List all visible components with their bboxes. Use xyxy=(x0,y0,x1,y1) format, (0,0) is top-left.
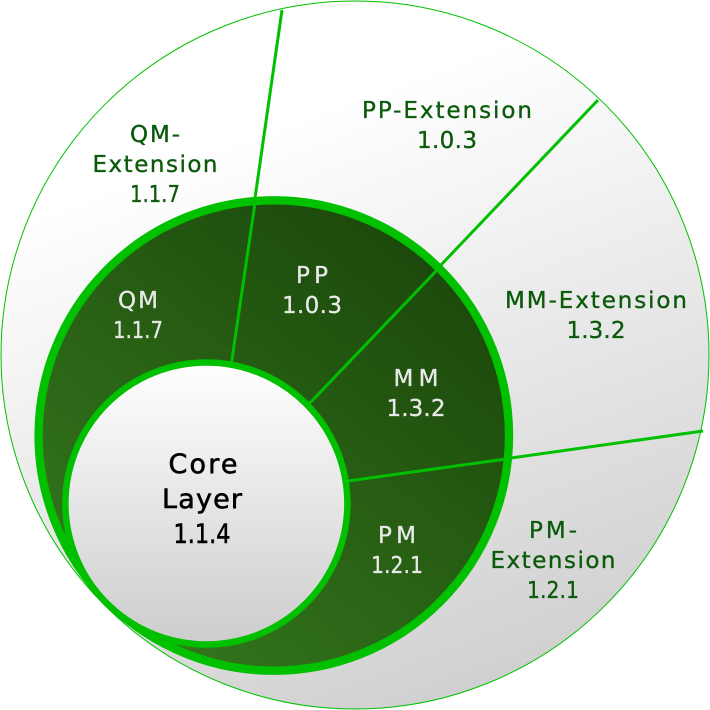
extension dividers xyxy=(255,10,703,458)
label: PM-Extension: 1.2.1 xyxy=(527,578,579,604)
label: QM: QM xyxy=(118,288,158,314)
extension labels xyxy=(92,98,687,604)
label: PP-Extension: PP-Extension xyxy=(362,98,532,124)
label: MM: 1.3.2 xyxy=(386,396,446,422)
label: PM-Extension: PM- xyxy=(529,518,577,544)
core label: 1.1.4 xyxy=(174,519,230,550)
label: MM: MM xyxy=(394,366,438,392)
label: PM-Extension: Extension xyxy=(490,548,616,574)
label: MM-Extension: MM-Extension xyxy=(505,288,687,314)
label: PP-Extension: 1.0.3 xyxy=(417,128,477,154)
core label xyxy=(162,449,243,550)
label: QM-Extension: 1.1.7 xyxy=(130,182,180,208)
label: PP: 1.0.3 xyxy=(282,293,342,319)
label: PM: 1.2.1 xyxy=(371,553,423,579)
core label: Core xyxy=(168,449,238,480)
label: PM: PM xyxy=(378,523,416,549)
module dividers xyxy=(231,203,506,481)
label: QM-Extension: Extension xyxy=(92,152,218,178)
label: PP: PP xyxy=(296,263,328,289)
core label: Layer xyxy=(162,484,243,515)
middle module ring xyxy=(39,200,509,671)
label: QM-Extension: QM- xyxy=(130,122,180,148)
module labels xyxy=(113,263,446,579)
label: MM-Extension: 1.3.2 xyxy=(566,318,626,344)
label: QM: 1.1.7 xyxy=(113,318,163,344)
core circle xyxy=(65,362,347,644)
